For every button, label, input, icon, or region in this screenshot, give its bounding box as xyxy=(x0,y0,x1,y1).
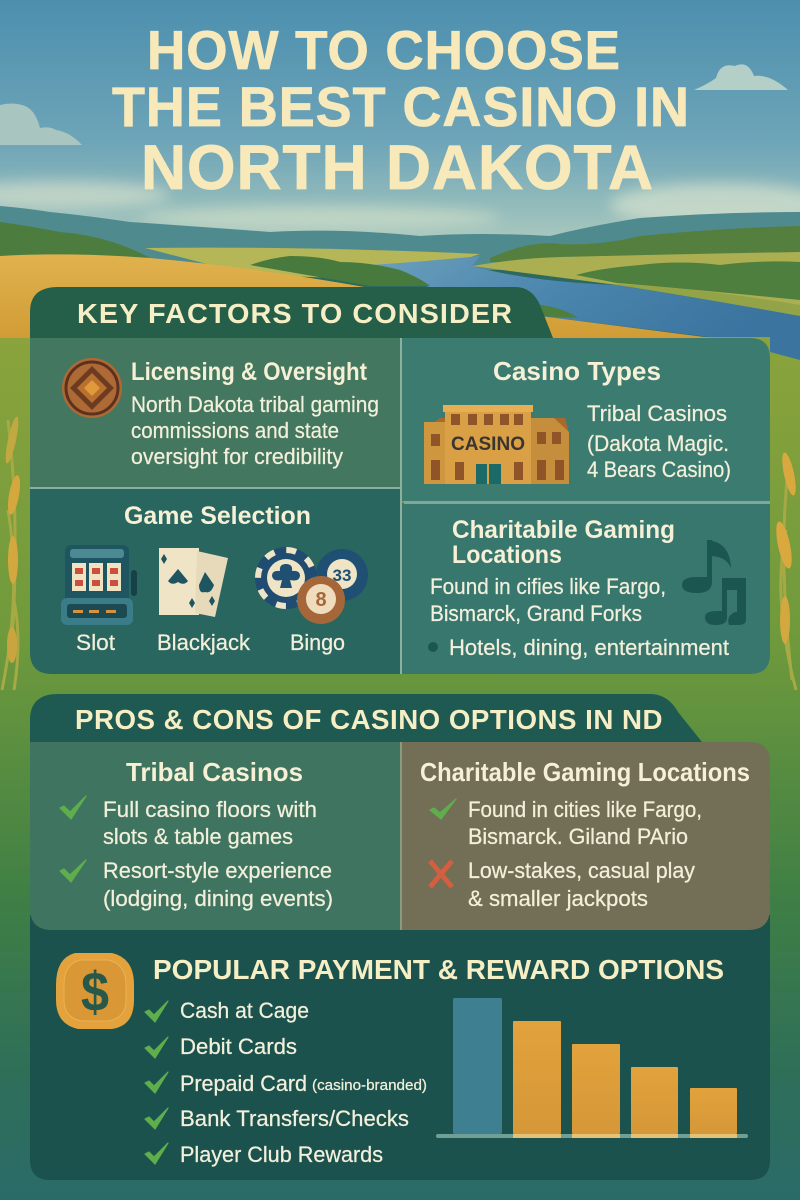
icon: casino building: CASINO xyxy=(451,434,525,455)
cell: game selection: Blackjack xyxy=(157,630,251,655)
list: payment options: Bank Transfers/Checks xyxy=(180,1106,409,1131)
cell: licensing and oversight xyxy=(30,338,400,487)
cell: licensing and oversight: commissions and state xyxy=(131,418,339,443)
cell: charitable gaming locations: Charitabile Gaming xyxy=(452,516,675,544)
title xyxy=(112,19,690,203)
icon: slot machine xyxy=(61,545,137,625)
cell: charitable gaming locations: Bismarck, Grand Forks xyxy=(430,601,642,626)
cell: charitable gaming locations xyxy=(402,742,770,930)
list: payment options: Cash at Cage xyxy=(180,998,309,1023)
title: NORTH DAKOTA xyxy=(141,133,654,203)
icon: chips and bingo balls: 8 xyxy=(315,589,327,611)
icon: check xyxy=(60,796,86,819)
icon: dollar coin xyxy=(56,953,134,1029)
cell: charitable gaming locations xyxy=(402,501,770,674)
icon: bullet dot xyxy=(428,642,438,652)
cell: casino types: (Dakota Magic. xyxy=(587,431,729,456)
cell: tribal casinos: Tribal Casinos xyxy=(126,757,303,787)
icon: cross xyxy=(430,861,452,887)
panel: key factors xyxy=(30,287,770,674)
cell: charitable gaming locations: & smaller jackpots xyxy=(468,886,648,911)
cell: casino types: 4 Bears Casino) xyxy=(587,457,731,482)
heading: key factors tab xyxy=(30,287,553,338)
icon: casino building xyxy=(424,405,569,484)
icon: chips and bingo balls xyxy=(255,547,368,624)
list: payment options: Prepaid Card xyxy=(180,1071,307,1096)
cell: tribal casinos: Full casino floors with xyxy=(103,797,317,822)
heading: payment options: POPULAR PAYMENT & REWARD OPTIONS xyxy=(153,954,724,985)
panel: payment and reward options xyxy=(30,915,770,1180)
cell: licensing and oversight: North Dakota tribal gaming xyxy=(131,392,379,417)
cell: charitable gaming locations: Low-stakes, casual play xyxy=(468,858,695,883)
cell: charitable gaming locations: Locations xyxy=(452,541,562,569)
cell: charitable gaming locations: Hotels, dining, entertainment xyxy=(449,635,729,660)
icon: check xyxy=(60,860,86,882)
icon: playing cards xyxy=(159,548,228,617)
cell: casino types: Tribal Casinos xyxy=(587,401,727,426)
panel: pros and cons xyxy=(30,694,770,930)
list: payment options xyxy=(145,998,427,1167)
cell: charitable gaming locations: Found in cifies like Fargo, xyxy=(430,574,666,599)
title: HOW TO CHOOSE xyxy=(147,19,621,81)
title: THE BEST CASINO IN xyxy=(112,75,690,138)
cell: casino types: Casino Types xyxy=(493,356,661,386)
cell: tribal casinos: slots & table games xyxy=(103,824,293,849)
cell: charitable gaming locations: Bismarck. Giland PArio xyxy=(468,824,688,849)
cell: casino types xyxy=(402,338,770,501)
cell: tribal casinos: (lodging, dining events) xyxy=(103,886,333,911)
icon: dollar coin: $ xyxy=(81,960,109,1023)
cell: charitable gaming locations: Found in cities like Fargo, xyxy=(468,797,702,822)
cell: game selection: Bingo xyxy=(290,630,345,655)
icon: chips and bingo balls: 33 xyxy=(333,566,351,585)
cell: tribal casinos: Resort-style experience xyxy=(103,858,332,883)
cell: tribal casinos xyxy=(30,742,400,930)
cell: charitable gaming locations: Charitable Gaming Locations xyxy=(420,757,750,787)
list: payment options: (casino-branded) xyxy=(312,1077,427,1094)
cell: licensing and oversight: Licensing & Oversight xyxy=(131,358,368,386)
heading: pros and cons tab: PROS & CONS OF CASINO OPTIONS IN ND xyxy=(75,704,663,735)
cell: game selection xyxy=(30,489,400,674)
cell: game selection: Slot xyxy=(76,630,115,655)
icon: tribal medallion xyxy=(62,358,122,418)
list: payment options: Debit Cards xyxy=(180,1034,297,1059)
cell: licensing and oversight: oversight for credibility xyxy=(131,444,343,469)
icon: music notes xyxy=(682,540,746,625)
heading: key factors tab: KEY FACTORS TO CONSIDER xyxy=(77,298,513,329)
icon: check xyxy=(430,799,456,819)
list: payment options: Player Club Rewards xyxy=(180,1142,383,1167)
cell: game selection: Game Selection xyxy=(124,502,311,530)
bar chart xyxy=(436,998,748,1138)
heading: pros and cons tab xyxy=(30,694,702,742)
